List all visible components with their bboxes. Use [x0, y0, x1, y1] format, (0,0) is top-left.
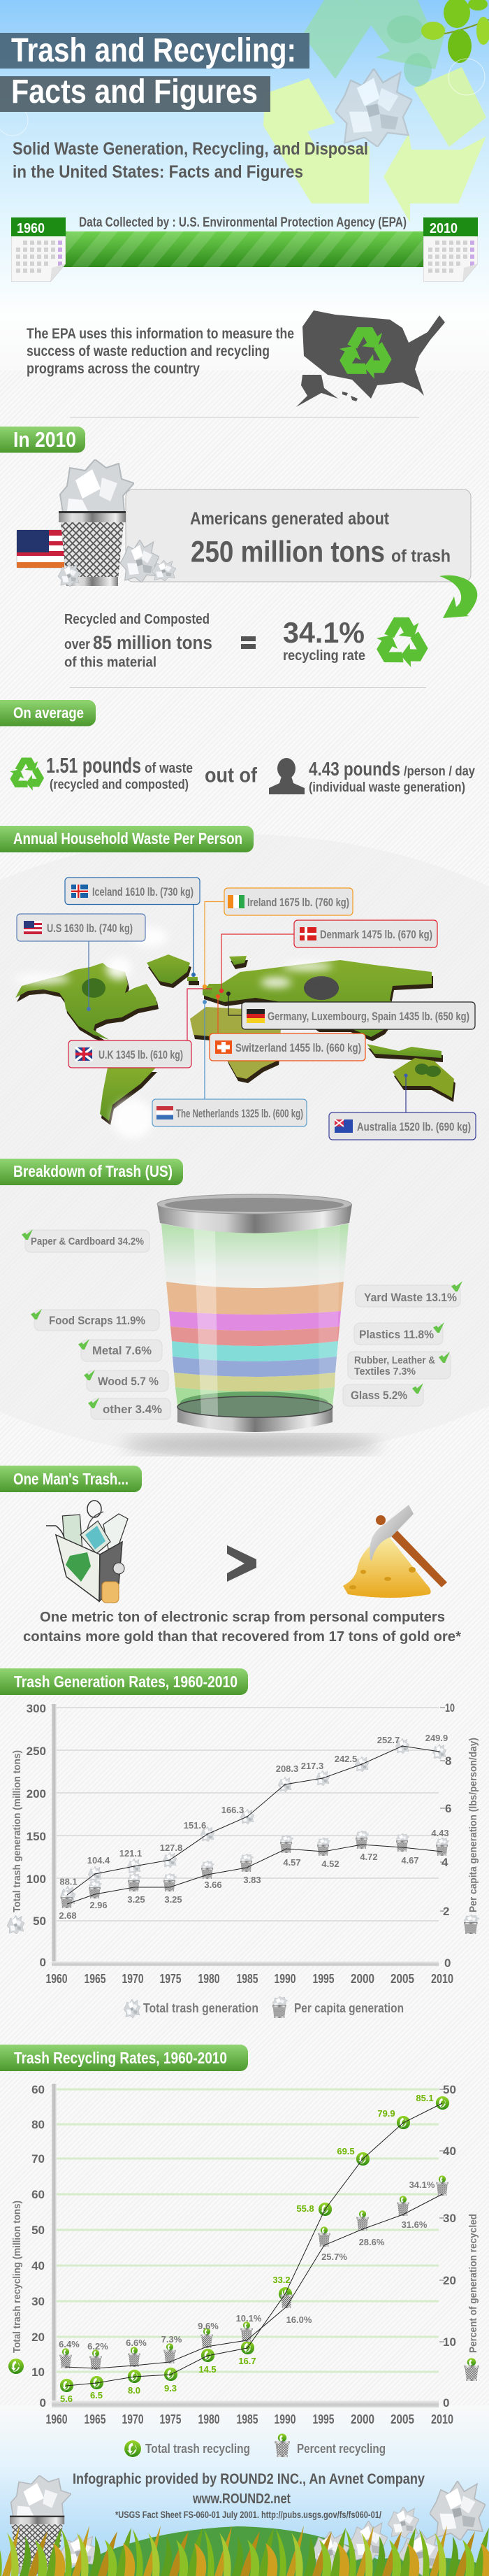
- right axis values: 10: [445, 1701, 455, 1715]
- x axis years: [46, 2412, 453, 2426]
- label: rubber leather and textiles: Textiles 7.3%: [354, 1366, 416, 1378]
- x axis years: 1990: [274, 2412, 296, 2426]
- label: Denmark: [294, 920, 437, 947]
- data labels: total recycling: 9.3: [164, 2383, 177, 2393]
- data labels: total trash: 166.3: [221, 1805, 244, 1815]
- left axis values: 70: [31, 2152, 45, 2166]
- data labels: per capita: 4.67: [401, 1855, 419, 1866]
- band: metal: [172, 1341, 338, 1361]
- decorative leaves: [0, 0, 489, 136]
- text: 4.43 pounds: [309, 758, 475, 795]
- recycling rate: recycling rate: [283, 648, 365, 664]
- x axis years: 1960: [46, 1972, 67, 1986]
- data labels: total trash: 88.1: [59, 1877, 78, 1887]
- left axis values: 50: [31, 2224, 45, 2237]
- label: The Netherlands: The Netherlands 1325 lb. (600 kg): [176, 1107, 303, 1120]
- text: recycled and composted: [64, 612, 212, 670]
- data labels: percent recycling: 7.3%: [161, 2334, 182, 2345]
- icon: crumpled paper: [335, 69, 412, 147]
- legend: trash generation: [124, 1996, 404, 2018]
- data labels: total trash: 242.5: [335, 1754, 357, 1764]
- axis icon left: [8, 2358, 24, 2375]
- legend: trash generation: Per capita generation: [294, 2001, 404, 2015]
- equals sign: [241, 636, 256, 649]
- footer credits: Infographic provided by ROUND2 INC., An Avnet Company: [73, 2471, 425, 2487]
- EPA text: The EPA uses this information to measure the: [27, 326, 294, 342]
- footer scene: hill, bin, paper, grass: [0, 2475, 489, 2576]
- subtitle: [13, 139, 368, 182]
- label: metal: Metal 7.6%: [92, 1344, 152, 1357]
- x axis years: 1970: [122, 2412, 144, 2426]
- label: Denmark: Denmark 1475 lb. (670 kg): [320, 928, 432, 941]
- data labels: percent recycling: 34.1%: [409, 2180, 435, 2190]
- icon: electronics bag: [46, 1501, 128, 1603]
- data labels: total trash: 252.7: [377, 1735, 400, 1745]
- right axis values: 10: [443, 2335, 456, 2349]
- text: metric ton fact: [23, 1610, 461, 1645]
- left axis values: 150: [27, 1830, 46, 1843]
- series lines: [67, 1746, 442, 1904]
- data labels: per capita: 3.25: [127, 1894, 145, 1905]
- data labels: total recycling: 5.6: [60, 2393, 73, 2404]
- x axis years: 2010: [431, 1972, 453, 1986]
- x axis years: 1995: [313, 2412, 334, 2426]
- right axis values: 30: [443, 2212, 456, 2225]
- text: out of: out of: [205, 764, 258, 787]
- chart: trash generation rates: [7, 1701, 479, 1986]
- x axis years: 1985: [236, 1972, 258, 1986]
- label: glass: Glass 5.2%: [351, 1389, 407, 1402]
- series lines: [66, 2103, 442, 2386]
- greater than symbol: [227, 1545, 256, 1582]
- label: yard waste: Yard Waste 13.1%: [364, 1291, 457, 1304]
- left axis values: 40: [31, 2259, 45, 2273]
- label: glass: [343, 1383, 423, 1406]
- label: Ireland: Ireland 1675 lb. (760 kg): [247, 896, 349, 909]
- divider: [70, 687, 426, 688]
- left axis values: 60: [31, 2083, 45, 2096]
- title: Trash and Recycling:: [11, 32, 296, 69]
- label: U.K: U.K 1345 lb. (610 kg): [98, 1048, 183, 1061]
- panel: 250 million tons: [126, 489, 471, 582]
- data labels: total recycling: 33.2: [272, 2275, 291, 2285]
- left axis values: 0: [40, 2396, 46, 2410]
- EPA text: [27, 326, 294, 377]
- panel: 250 million tons: Americans generated about: [190, 509, 390, 529]
- data labels: percent recycling: 25.7%: [321, 2252, 347, 2262]
- text: 1.51 pounds: 1.51 pounds: [46, 753, 141, 778]
- x axis years: 1980: [198, 2412, 219, 2426]
- data labels: per capita: 2.96: [89, 1900, 108, 1910]
- data labels: percent recycling: 10.1%: [236, 2313, 262, 2324]
- right axis values: 6: [445, 1802, 451, 1815]
- data labels: percent recycling: 9.6%: [198, 2321, 219, 2331]
- icon: American flag: [17, 530, 64, 568]
- x axis years: 1970: [122, 1972, 144, 1986]
- label: wood: [84, 1370, 168, 1391]
- x axis years: 2005: [391, 2412, 414, 2426]
- heading: trash generation rates: Trash Generation Rates, 1960-2010: [14, 1673, 238, 1691]
- x axis years: [46, 1972, 453, 1986]
- recycling rate: [283, 616, 365, 664]
- x axis years: 2005: [391, 1972, 414, 1986]
- chart: trash recycling rates: [8, 2083, 479, 2426]
- label: rubber leather and textiles: Rubber, Leather &: [354, 1354, 435, 1366]
- legend: recycling: [124, 2433, 386, 2458]
- label: rubber leather and textiles: [348, 1352, 451, 1379]
- icon: trash bin with paper: [58, 459, 176, 587]
- data labels: percent recycling: [59, 2180, 435, 2352]
- data labels: percent recycling: 28.6%: [359, 2237, 385, 2247]
- data labels: per capita: [59, 1828, 449, 1921]
- band: paper and cardboard: [161, 1224, 349, 1288]
- right axis values: 0: [443, 2396, 449, 2410]
- right axis values: 50: [443, 2083, 456, 2096]
- text: recycled and composted: of this material: [64, 654, 156, 670]
- left axis values: 60: [31, 2188, 45, 2201]
- data labels: per capita: 3.25: [164, 1894, 182, 1905]
- left axis values: 300: [27, 1702, 46, 1715]
- timeline 1960 to 2010: 2010: [430, 221, 458, 236]
- title: Facts and Figures: [11, 73, 258, 110]
- data labels: per capita: 4.52: [321, 1859, 340, 1869]
- left axis values: 80: [31, 2118, 45, 2131]
- label: plastics: [354, 1322, 444, 1345]
- series markers: total recycling: [59, 2096, 450, 2393]
- series markers: percent recycling: [59, 2175, 448, 2370]
- axis title right: Per capita generation (lbs/person/day): [467, 1738, 479, 1912]
- band: glass and other: [175, 1387, 335, 1410]
- world map: [14, 927, 455, 1138]
- text: 1.51 pounds: (recycled and composted): [50, 778, 189, 792]
- data labels: total recycling: 16.7: [238, 2356, 256, 2366]
- text: 1.51 pounds: of waste: [145, 761, 193, 776]
- arrow: curved green: [439, 575, 477, 618]
- panel: 250 million tons: 250 million tons: [191, 536, 385, 569]
- left axis values: 30: [31, 2295, 45, 2308]
- right axis values: 40: [443, 2145, 456, 2158]
- timeline 1960 to 2010: Data Collected by : U.S. Environmental Protection Agency (EPA): [79, 215, 407, 230]
- label: wood: Wood 5.7 %: [98, 1375, 159, 1388]
- data labels: percent recycling: 6.6%: [126, 2338, 147, 2348]
- x axis years: 1975: [159, 2412, 182, 2426]
- divider: [70, 417, 419, 418]
- footer credits: www.ROUND2.net: [192, 2491, 291, 2507]
- right axis values: 0: [444, 1956, 451, 1970]
- label: Germany, Luxembourg, Spain: [242, 1002, 475, 1029]
- footer credits: [73, 2471, 425, 2520]
- series markers: total trash: [60, 1738, 446, 1907]
- text: 4.43 pounds: 4.43 pounds: [309, 758, 400, 780]
- x axis years: 2000: [351, 2412, 374, 2426]
- data labels: total trash: 249.9: [425, 1733, 448, 1743]
- text: recycled and composted: over: [64, 637, 90, 652]
- x axis years: 1975: [159, 1972, 182, 1986]
- data labels: total trash: 217.3: [301, 1761, 323, 1771]
- x axis years: 1995: [313, 1972, 334, 1986]
- data labels: per capita: 4.57: [283, 1857, 301, 1868]
- x axis years: 2010: [431, 2412, 453, 2426]
- label: other: [88, 1398, 170, 1419]
- text: metric ton fact: One metric ton of electronic scrap from personal computers: [40, 1610, 445, 1625]
- icon: recycling small: [7, 758, 48, 793]
- label: The Netherlands: [152, 1099, 307, 1126]
- data labels: total trash: 151.6: [184, 1820, 206, 1831]
- data labels: total trash: [59, 1733, 448, 1887]
- right axis values: [439, 2083, 456, 2410]
- panel: 250 million tons: of trash: [391, 547, 451, 566]
- label: U.S: [17, 914, 145, 941]
- data labels: total trash: 208.3: [276, 1763, 298, 1774]
- right axis values: 4: [441, 1856, 448, 1869]
- heading: On average: [0, 700, 96, 726]
- icon: USA map with recycling symbol: [296, 310, 445, 407]
- x axis years: 1965: [84, 2412, 106, 2426]
- right axis values: [440, 1701, 455, 1970]
- text: recycled and composted: 85 million tons: [93, 632, 212, 653]
- axis icon right: [464, 2358, 479, 2381]
- text: recycled and composted: Recycled and Composted: [64, 612, 210, 627]
- icon: gold pile with pick: [343, 1505, 447, 1598]
- label: Australia: [329, 1112, 476, 1140]
- data labels: total recycling: 6.5: [90, 2390, 103, 2400]
- label: yard waste: [356, 1281, 462, 1307]
- data labels: percent recycling: 6.2%: [87, 2341, 108, 2352]
- label: other: other 3.4%: [103, 1403, 162, 1416]
- heading: annual household waste: Annual Household Waste Per Person: [13, 829, 242, 847]
- label: plastics: Plastics 11.8%: [359, 1328, 434, 1341]
- heading: one man's trash: One Man's Trash...: [13, 1470, 129, 1488]
- data labels: per capita: 3.66: [204, 1880, 222, 1890]
- label: Iceland: [65, 878, 200, 905]
- text: 1.51 pounds: [46, 753, 193, 792]
- x axis years: 1960: [46, 2412, 67, 2426]
- x axis years: 1985: [236, 2412, 258, 2426]
- series markers: per capita: [61, 1831, 449, 1908]
- chart: trash bin breakdown: [122, 1194, 381, 1454]
- label: U.K: [68, 1040, 191, 1068]
- x axis years: 1965: [84, 1972, 106, 1986]
- label: paper and cardboard: [22, 1229, 149, 1252]
- data labels: total recycling: 79.9: [377, 2108, 395, 2119]
- heading: breakdown of trash: Breakdown of Trash (US): [13, 1162, 173, 1180]
- right axis values: 8: [445, 1754, 451, 1768]
- left axis values: [31, 2083, 46, 2410]
- label: paper and cardboard: Paper & Cardboard 34.2%: [31, 1236, 144, 1247]
- x axis years: 1980: [198, 1972, 219, 1986]
- right axis values: 2: [443, 1905, 449, 1918]
- legend: recycling: Percent recycling: [297, 2442, 386, 2456]
- data labels: per capita: 3.83: [243, 1875, 261, 1885]
- label: metal: [78, 1339, 162, 1361]
- data labels: total recycling: 14.5: [198, 2364, 217, 2375]
- background recycling symbol: [263, 0, 486, 222]
- heading: trash recycling rates: [0, 2045, 248, 2071]
- data labels: per capita: 2.68: [59, 1910, 77, 1921]
- axis icon left: [7, 1915, 24, 1934]
- x axis years: 1990: [274, 1972, 296, 1986]
- data labels: per capita: 4.72: [360, 1852, 378, 1862]
- icon: recycling: [372, 617, 433, 671]
- label: Switzerland: [210, 1033, 365, 1061]
- band: rubber leather textiles: [173, 1357, 337, 1377]
- x axis years: 2000: [351, 1972, 374, 1986]
- heading: On average: On average: [13, 704, 84, 722]
- heading: one man's trash: [0, 1466, 142, 1492]
- legend: recycling: Total trash recycling: [145, 2442, 250, 2456]
- data labels: total trash: 127.8: [160, 1842, 182, 1853]
- timeline 1960 to 2010: 1960: [17, 221, 45, 236]
- left axis values: 50: [33, 1915, 46, 1928]
- label: Iceland: Iceland 1610 lb. (730 kg): [92, 885, 194, 899]
- left axis values: 100: [27, 1873, 46, 1886]
- data labels: total recycling: 85.1: [416, 2093, 434, 2103]
- timeline 1960 to 2010: [11, 215, 478, 282]
- data labels: total trash: 121.1: [119, 1848, 142, 1859]
- data labels: total recycling: 69.5: [337, 2146, 355, 2156]
- data labels: total recycling: 55.8: [296, 2203, 314, 2214]
- title: [0, 32, 309, 112]
- heading: trash recycling rates: Trash Recycling Rates, 1960-2010: [14, 2049, 227, 2067]
- left axis values: 10: [31, 2366, 45, 2379]
- band: wood: [174, 1373, 335, 1391]
- label: food scraps: [31, 1309, 159, 1331]
- axis title right: Percent of generation recycled: [467, 2214, 479, 2353]
- label: U.S: U.S 1630 lb. (740 kg): [47, 922, 133, 935]
- band: yard waste: [166, 1282, 344, 1315]
- left axis values: [27, 1702, 46, 1969]
- label: food scraps: Food Scraps 11.9%: [49, 1314, 145, 1327]
- axis title left: Total trash recycling (million tons): [11, 2201, 23, 2353]
- EPA text: programs across the country: [27, 361, 200, 377]
- legend: trash generation: Total trash generation: [143, 2001, 258, 2015]
- axis icon right: [464, 1915, 479, 1934]
- data labels: total recycling: 8.0: [128, 2385, 140, 2396]
- EPA text: success of waste reduction and recycling: [27, 343, 270, 359]
- heading: breakdown of trash: [0, 1159, 183, 1185]
- label: Switzerland: Switzerland 1455 lb. (660 kg): [235, 1041, 361, 1054]
- left axis values: 200: [27, 1787, 46, 1801]
- icon: person: [269, 758, 305, 794]
- data labels: percent recycling: 31.6%: [402, 2219, 428, 2230]
- data labels: total trash: 104.4: [87, 1855, 110, 1866]
- band: food scraps: [169, 1311, 341, 1331]
- text: 4.43 pounds: /person / day: [404, 764, 475, 779]
- axis title left: Total trash generation (million tons): [11, 1750, 23, 1912]
- heading: In 2010: In 2010: [13, 427, 76, 452]
- data labels: total recycling: [60, 2093, 434, 2404]
- leader lines and dots: [87, 902, 408, 1112]
- text: 4.43 pounds: (individual waste generation): [309, 780, 465, 795]
- left axis values: 0: [40, 1956, 46, 1969]
- heading: annual household waste: [0, 826, 254, 852]
- label: Ireland: [224, 888, 353, 915]
- subtitle: Solid Waste Generation, Recycling, and Disposal: [13, 139, 368, 159]
- data labels: per capita: 4.43: [431, 1828, 449, 1838]
- data labels: percent recycling: 6.4%: [59, 2339, 80, 2349]
- data labels: percent recycling: 16.0%: [286, 2314, 312, 2325]
- heading: trash generation rates: [0, 1668, 248, 1695]
- recycling rate: 34.1%: [283, 616, 365, 649]
- left axis values: 250: [27, 1745, 46, 1758]
- band: plastics: [170, 1326, 340, 1346]
- subtitle: in the United States: Facts and Figures: [13, 162, 303, 182]
- right axis values: 20: [443, 2274, 456, 2287]
- left axis values: 20: [31, 2331, 45, 2344]
- text: metric ton fact: contains more gold than that recovered from 17 tons of gold ore*: [23, 1629, 461, 1645]
- footer credits: *USGS Fact Sheet FS-060-01 July 2001. http://pubs.usgs.gov/fs/fs060-01/: [115, 2509, 381, 2520]
